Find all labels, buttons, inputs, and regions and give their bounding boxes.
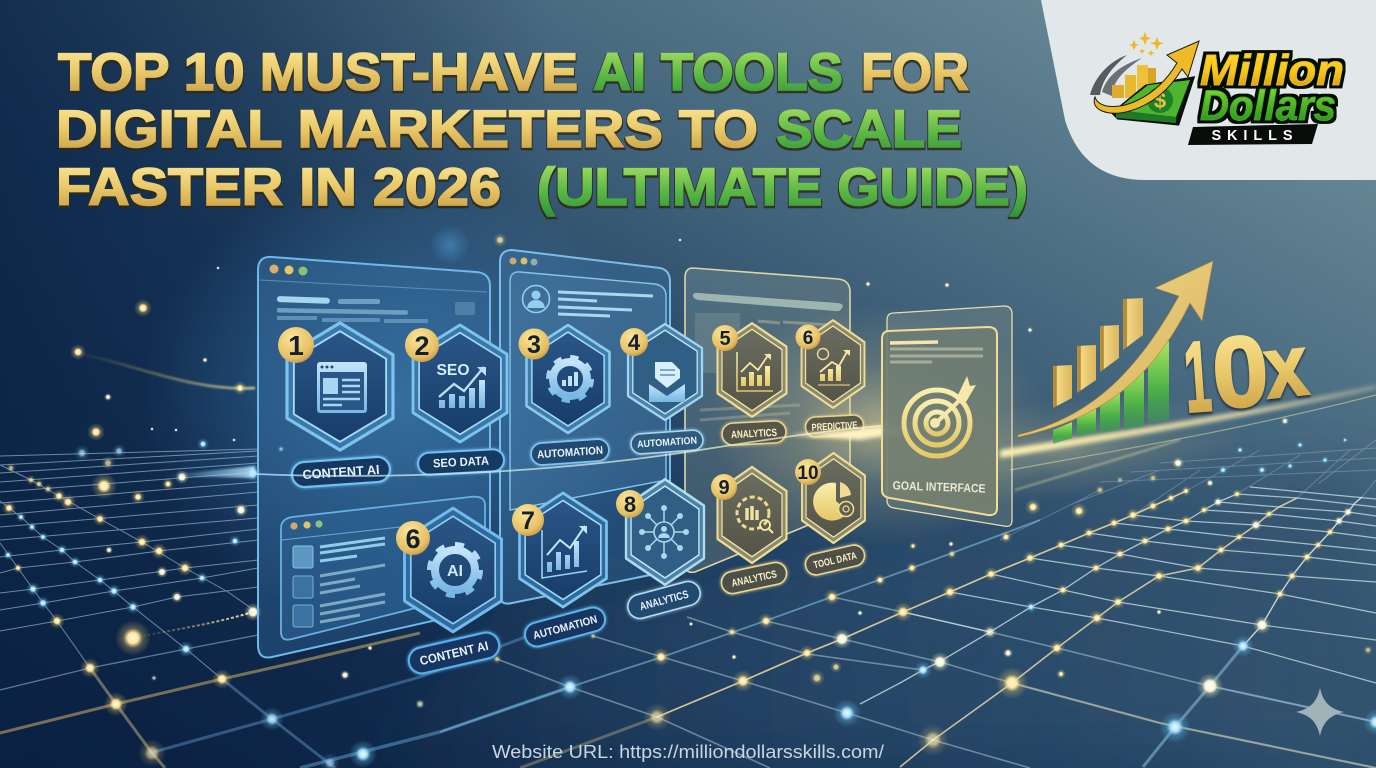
icon: pie chart and coin <box>813 482 854 521</box>
panel: middle window <box>500 250 670 604</box>
tool hexagon 7: automation <box>520 493 606 607</box>
icon: SEO chart: SEO <box>436 362 470 379</box>
tool label pills: ANALYTICS <box>731 427 777 441</box>
title: FASTER IN 2026 <box>56 158 501 217</box>
number badges: 8 <box>624 492 636 517</box>
logo: Million Dollars Skills <box>1090 32 1344 145</box>
growth arrow <box>1018 261 1213 437</box>
panel: right gold window <box>685 268 850 572</box>
10x multiplier: x <box>1260 317 1312 417</box>
tool hexagon 9: analytics search <box>718 467 786 563</box>
tool label pills: CONTENT AI <box>302 462 380 482</box>
number badges: 2 <box>414 331 430 361</box>
tool hexagon 1: content AI <box>287 323 393 450</box>
number badges: 5 <box>719 328 731 350</box>
icon: cash stack: $ <box>1154 88 1166 113</box>
icon: AI gear: AI <box>447 563 463 580</box>
icon: gear with bars <box>549 358 591 400</box>
title: TOP 10 MUST-HAVE <box>58 43 578 102</box>
tool label pills: SEO DATA <box>433 454 490 470</box>
icon: gold chart <box>737 352 773 391</box>
floor node lights <box>2 417 1376 768</box>
icon: target with arrow <box>904 376 976 456</box>
10x multiplier: 1 <box>1181 320 1214 434</box>
growth bar chart <box>1053 298 1169 444</box>
title: (ULTIMATE GUIDE) <box>537 158 1028 217</box>
title: FOR <box>861 43 969 102</box>
title: AI TOOLS <box>593 43 843 102</box>
tool label pills: ANALYTICS <box>639 589 690 613</box>
golden haze behind goal card <box>710 305 1254 545</box>
number badges: 9 <box>718 477 730 499</box>
tool hexagon 6: predictive <box>802 320 864 408</box>
icon: growth chart <box>542 526 587 578</box>
10x multiplier: 0 <box>1209 314 1272 430</box>
number badges: 4 <box>628 330 641 355</box>
icon: cash stack <box>1113 78 1193 124</box>
logo wordmark Million: Million <box>1200 46 1344 95</box>
title: SCALE <box>776 100 962 159</box>
tool hexagon 5: analytics <box>718 323 786 417</box>
icon: sparkle stars <box>1129 32 1164 57</box>
icon: people network <box>639 505 689 559</box>
website URL footer: Website URL: https://milliondollarsskills.com/ <box>492 742 884 762</box>
tool label pills: PREDICTIVE <box>811 420 858 434</box>
tool hexagon 3: automation <box>526 325 610 433</box>
10x multiplier <box>1181 314 1312 434</box>
number badges: 3 <box>527 331 541 359</box>
left light streaks <box>70 233 1033 638</box>
tool hexagon 2: SEO data <box>413 325 507 442</box>
title: DIGITAL MARKETERS TO <box>56 100 758 159</box>
tool label pills: ANALYTICS <box>730 568 778 590</box>
title <box>56 43 1028 217</box>
panel: lower-left window <box>281 497 485 640</box>
number badges: 6 <box>803 328 813 349</box>
goal interface card: GOAL INTERFACE <box>892 478 986 496</box>
perspective floor grid <box>0 440 1376 768</box>
icon: envelope <box>649 362 685 402</box>
tool label pills: AUTOMATION <box>537 445 603 461</box>
logo skills bar <box>1188 124 1318 145</box>
logo corner panel <box>1041 0 1376 180</box>
tool label pills: AUTOMATION <box>532 614 599 642</box>
icon: gold arrow <box>1094 41 1199 113</box>
tool label pills: AUTOMATION <box>637 435 697 451</box>
icon: sparkle watermark <box>1296 688 1344 736</box>
goal interface card <box>882 306 1012 526</box>
golden light beam to the right <box>1000 385 1376 490</box>
tool hexagon 8: analytics network <box>626 479 704 585</box>
panel: back-left window <box>258 225 490 658</box>
number badges: 6 <box>405 524 421 554</box>
tool hexagon 4: automation <box>628 324 702 420</box>
icon: globe chart <box>818 348 850 385</box>
tool label pills <box>291 414 867 676</box>
number badges <box>278 324 821 555</box>
number badges: 1 <box>288 330 304 361</box>
logo wordmark Dollars: Dollars <box>1200 82 1336 130</box>
icon: browser window <box>317 362 367 413</box>
number badges: 7 <box>521 507 535 535</box>
number badges: 10 <box>797 463 819 484</box>
tool hexagon 6 lower: AI gear <box>404 508 502 632</box>
tool hexagon 10: tool data <box>802 453 865 543</box>
icon: swoosh and gold bars <box>1090 55 1156 98</box>
logo skills bar: SKILLS <box>1212 128 1293 144</box>
blue to gold light beam <box>255 425 920 476</box>
tool label pills: CONTENT AI <box>418 639 490 668</box>
tool label pills: TOOL DATA <box>813 551 858 571</box>
icon: gear and magnifier <box>737 497 773 533</box>
